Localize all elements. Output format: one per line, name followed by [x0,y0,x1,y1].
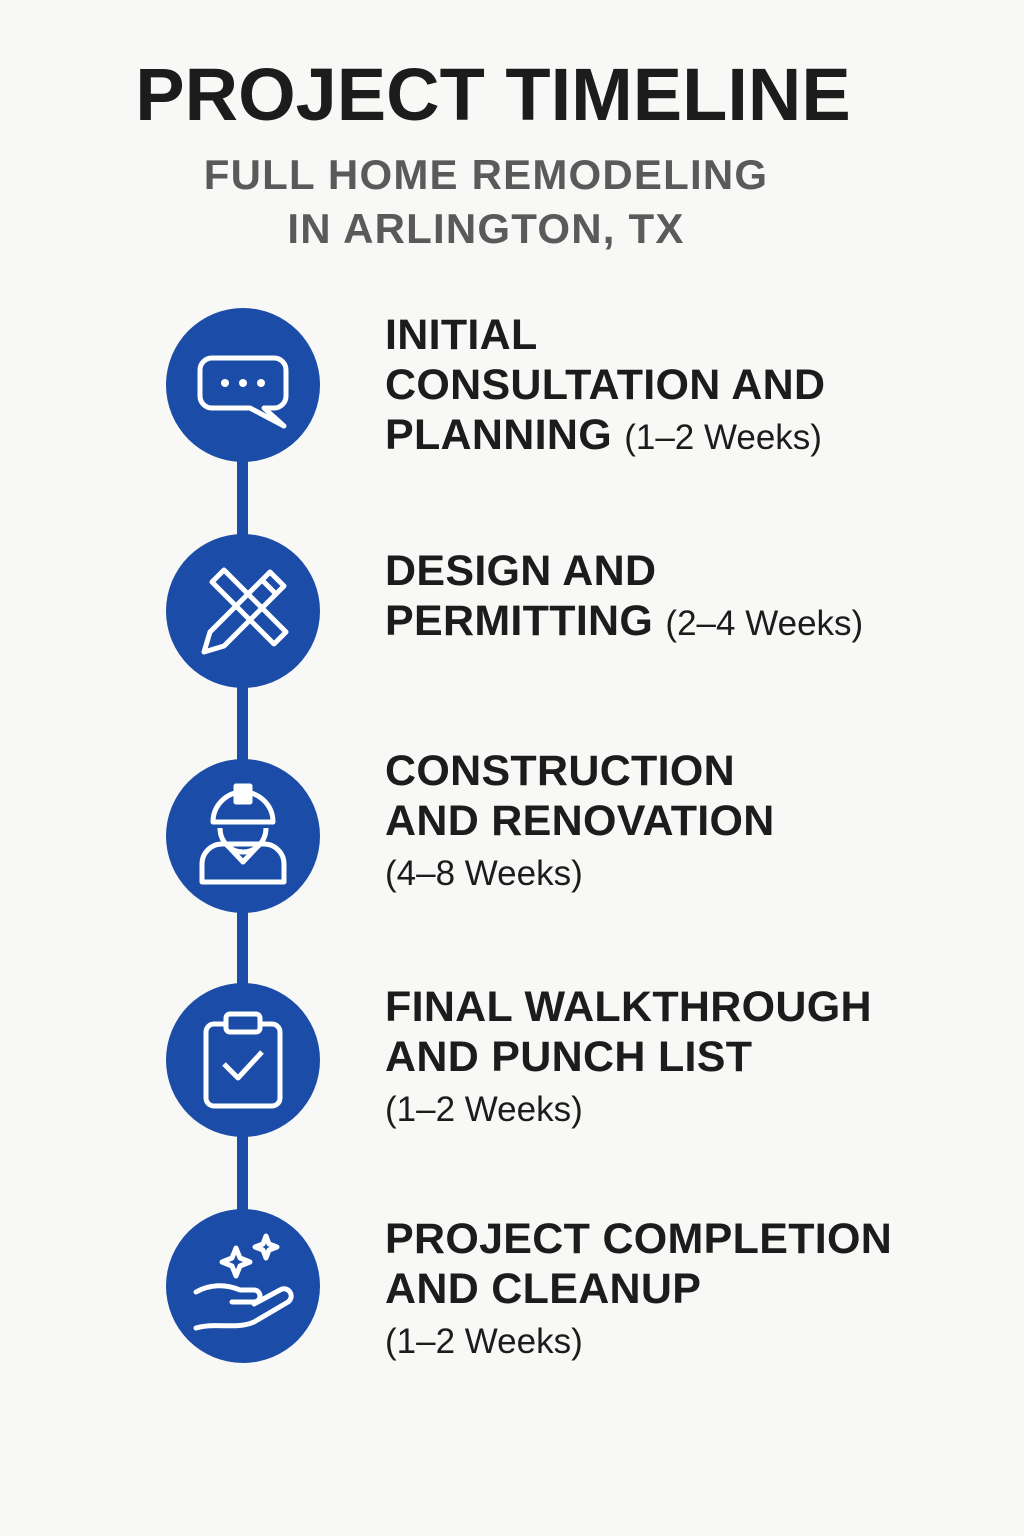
icon: hand sparkle [166,1209,320,1363]
icon: worker [166,759,320,913]
icon: chat [166,308,320,462]
step 5 [385,1215,892,1361]
subtitle: IN ARLINGTON, TX [287,205,685,252]
step 4: AND PUNCH LIST [385,1033,752,1081]
step 2: PERMITTING (2–4 Weeks) [385,597,863,645]
step 5: PROJECT COMPLETION [385,1215,892,1263]
step 3: CONSTRUCTION [385,747,735,795]
step 2: DESIGN AND [385,547,656,595]
icon: clipboard [166,983,320,1137]
step 3 [385,747,775,893]
subtitle: FULL HOME REMODELING [204,151,768,198]
step 1: CONSULTATION AND [385,361,825,409]
title: PROJECT TIMELINE [135,53,851,136]
step 2 [385,547,863,645]
step 5: AND CLEANUP [385,1265,701,1313]
step 5: (1–2 Weeks) [385,1322,583,1361]
step 4: FINAL WALKTHROUGH [385,983,872,1031]
step 4: (1–2 Weeks) [385,1090,583,1129]
subtitle [204,151,768,252]
step 1: INITIAL [385,311,538,359]
icon: pencil ruler [166,534,320,688]
step 1 [385,311,825,459]
step 3: (4–8 Weeks) [385,854,583,893]
step 4 [385,983,872,1129]
step 1: PLANNING (1–2 Weeks) [385,411,822,459]
step 3: AND RENOVATION [385,797,775,845]
